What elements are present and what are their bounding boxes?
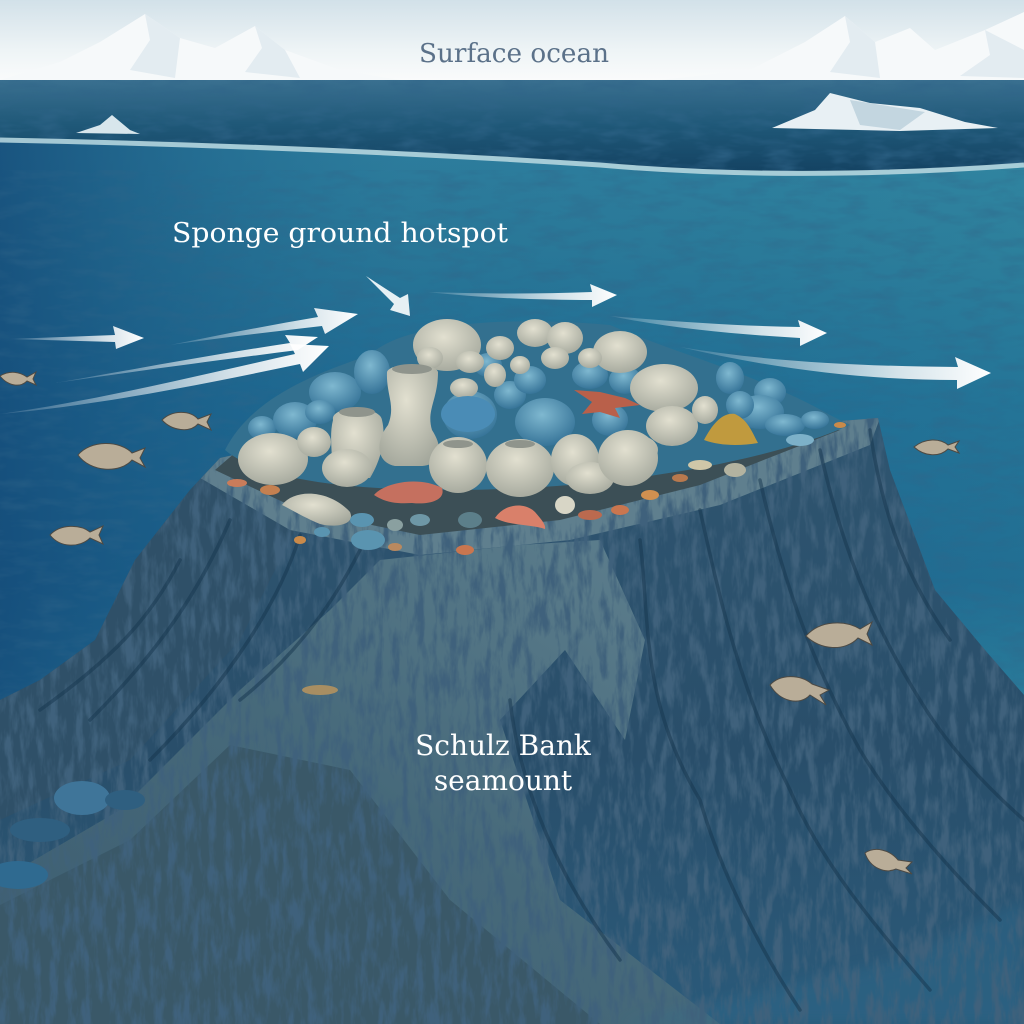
label: sponge ground hotspot: Sponge ground hotspot bbox=[172, 218, 508, 249]
blue dome sponge bbox=[441, 396, 495, 432]
fish bbox=[865, 849, 912, 874]
arrows bbox=[0, 276, 991, 414]
arrow bbox=[55, 335, 318, 383]
orange starfish bbox=[574, 390, 640, 418]
iceberg left bbox=[76, 115, 140, 134]
arrow bbox=[428, 284, 617, 307]
sponge ground bbox=[225, 319, 850, 555]
shaded left flank bbox=[47, 481, 198, 675]
fish bbox=[50, 526, 103, 545]
fish bbox=[770, 677, 829, 705]
fish bbox=[806, 622, 872, 648]
yellow creature bbox=[704, 414, 758, 445]
sea floor pebbles bbox=[227, 422, 846, 555]
arrow bbox=[366, 276, 410, 316]
distant mountains left bbox=[0, 14, 400, 80]
blue lower right bbox=[708, 913, 1016, 1016]
cliff gullies bbox=[40, 430, 1024, 1010]
pink creature bbox=[495, 505, 545, 529]
arrow bbox=[610, 316, 827, 346]
plateau top bbox=[215, 430, 840, 535]
arrow bbox=[680, 347, 991, 389]
pebbles lower left bbox=[0, 685, 338, 889]
arrow bbox=[170, 308, 358, 345]
waterline highlight bbox=[0, 140, 1024, 173]
surface sea bbox=[0, 80, 1024, 180]
label: Schulz Bank seamount: seamount bbox=[434, 764, 573, 797]
cream barrel sponges bbox=[238, 433, 308, 485]
label: Schulz Bank seamount: Schulz Bank bbox=[415, 729, 592, 762]
arrow bbox=[0, 344, 329, 414]
fish bbox=[162, 412, 211, 430]
fish group bbox=[0, 372, 959, 874]
arrow bbox=[10, 326, 144, 349]
fish bbox=[0, 372, 36, 385]
central ridge bbox=[0, 540, 720, 1024]
iceberg right bbox=[772, 93, 998, 131]
blue sponge mound bbox=[225, 321, 850, 490]
plateau rim bbox=[201, 418, 879, 555]
fish bbox=[914, 440, 959, 455]
lower left slope bbox=[0, 745, 600, 1024]
seamount bbox=[0, 418, 1024, 1024]
red creature bbox=[374, 482, 443, 503]
fish bbox=[78, 443, 145, 469]
background small sponges bbox=[248, 350, 829, 446]
distant mountains right bbox=[660, 12, 1024, 80]
sky bbox=[0, 0, 1024, 84]
label: surface ocean: Surface ocean bbox=[419, 39, 609, 69]
